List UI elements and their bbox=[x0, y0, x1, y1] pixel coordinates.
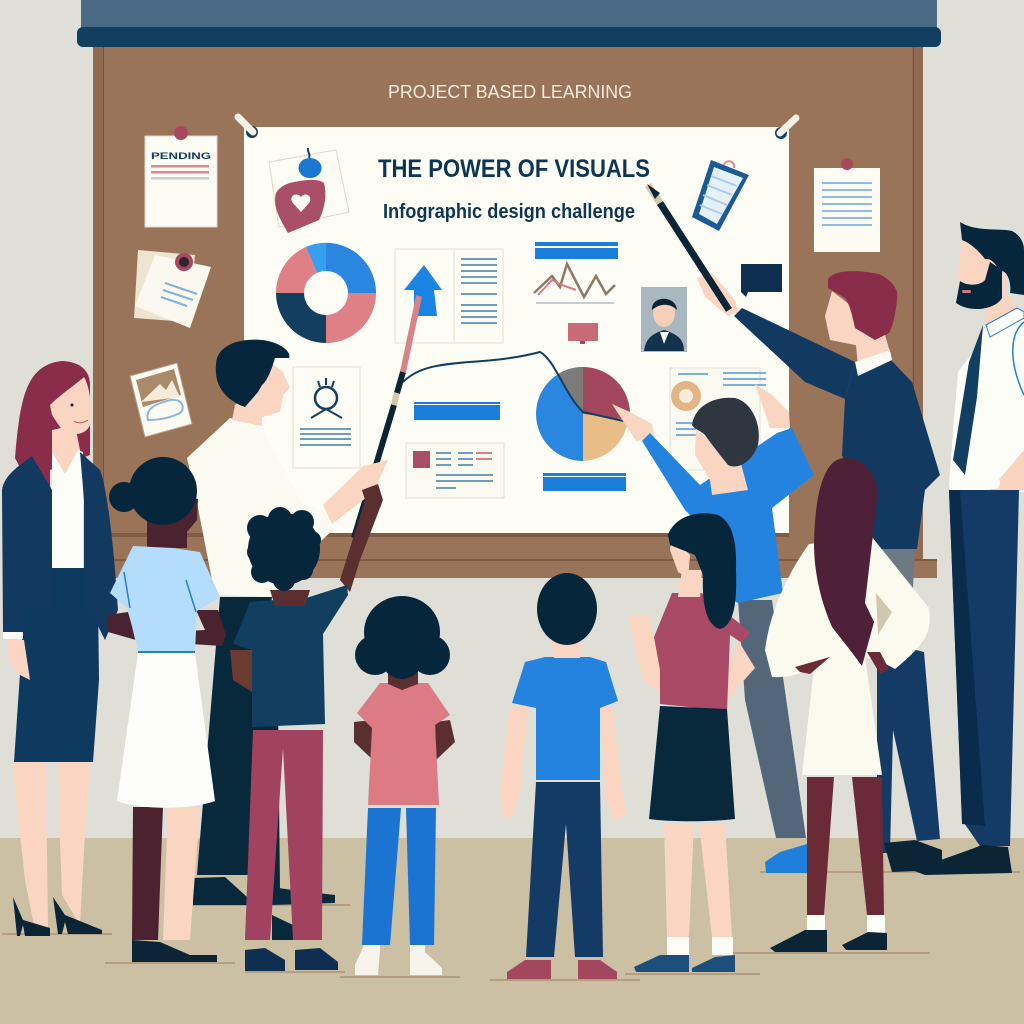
person: girl in white coat bbox=[765, 458, 930, 952]
speech bubble bbox=[741, 264, 782, 297]
text card bbox=[406, 443, 504, 498]
clipboard icon bbox=[692, 160, 749, 231]
note: landscape photo bbox=[130, 363, 192, 437]
blue bar heading with line chart bbox=[534, 242, 618, 304]
person: girl in maroon shirt bbox=[630, 513, 755, 972]
person: boy in blue t-shirt bbox=[500, 573, 627, 979]
poster icon: apple and heart bbox=[269, 148, 349, 233]
person: girl in light blue top bbox=[107, 457, 226, 962]
note: clipped papers left bbox=[134, 250, 211, 328]
person: boy in blue sweater bbox=[612, 384, 814, 873]
person: man in navy suit bbox=[647, 184, 942, 872]
board heading: PROJECT BASED LEARNING bbox=[388, 82, 632, 102]
person: woman with maroon hair bbox=[2, 361, 118, 936]
person: bearded man bbox=[912, 222, 1024, 875]
afro hair bbox=[247, 507, 321, 591]
roller rail bbox=[77, 27, 941, 47]
poster clips bbox=[238, 117, 796, 139]
person: child in pink shirt bbox=[354, 596, 455, 975]
blue bar lower bbox=[543, 473, 626, 491]
blue bar middle bbox=[414, 402, 500, 420]
donut chart bbox=[276, 243, 376, 343]
poster subtitle: Infographic design challenge bbox=[383, 201, 635, 223]
poster sheet bbox=[244, 127, 789, 533]
poster title: THE POWER OF VISUALS bbox=[378, 155, 650, 183]
info card right bbox=[670, 368, 766, 470]
person: man with pointer in white shirt bbox=[187, 340, 388, 940]
pink tag bbox=[568, 323, 598, 344]
note: top left: PENDING bbox=[151, 151, 211, 162]
pie chart bbox=[536, 367, 630, 461]
note: top left bbox=[145, 126, 217, 227]
child hair bbox=[355, 596, 450, 679]
connector line to pie bbox=[403, 352, 628, 422]
person icon card bbox=[293, 367, 360, 468]
arrow card bbox=[395, 249, 503, 343]
portrait photo bbox=[641, 287, 687, 352]
pointer stick left bbox=[354, 296, 419, 538]
floor bbox=[0, 838, 1024, 1024]
note: top right bbox=[814, 158, 880, 252]
person: boy in navy shirt bbox=[230, 484, 383, 971]
roller banner top bbox=[81, 0, 937, 29]
bulletin board bbox=[93, 47, 937, 578]
